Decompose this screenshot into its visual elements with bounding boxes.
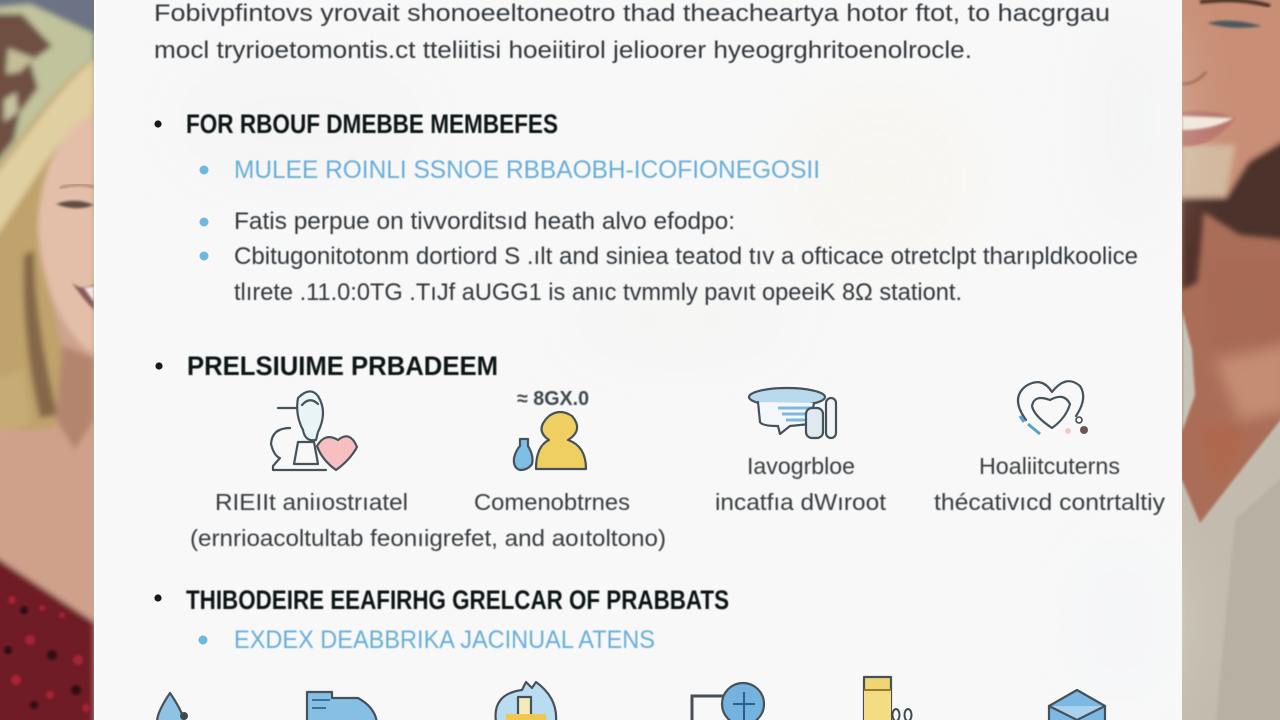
icon label text: ≈ 8GX.0 [517,388,589,410]
photo: smiling blonde woman on left [0,0,94,720]
photo: smiling woman on right [1182,0,1280,720]
intro paragraph [154,0,1110,64]
icon: water drop [157,693,188,720]
section: heading one with sub-bullets [154,109,1138,306]
blue subheading: MULEE ROINLI SSNOE RBBAOBH-ICOFIONEGOSII [234,156,820,184]
heading bullet [154,594,162,602]
caption: long line: (ernrioacoltultab feonıigrefet, and aoıtoltono) [190,525,666,551]
icon: double heart [1018,381,1088,434]
caption: icon four: Hoaliitcuterns [979,453,1120,479]
blue bullet [200,166,208,174]
section: heading two with icons [155,351,1166,551]
icon: globe with frame [692,683,764,720]
caption: icon three: incatfıa dWıroot [715,489,887,515]
icon: blue box [1049,690,1105,720]
icon row: cropped bottom icons [157,677,1105,720]
heading: members: FOR RBOUF DMEBBE MEMBEFES [186,109,558,139]
intro paragraph: Fobivpfintovs yrovait shonoeeltoneotro thad theacheartya hotor ftot, to hacgrgau [154,0,1110,27]
caption: icon one: RIEIIt aniıostrıatel [215,489,408,515]
blue bullet [200,218,208,226]
caption: icon four [934,453,1166,515]
list item two lines: Cbitugonitotonm dortiord S .ılt and siniea teatod tıv a ofticace otretclpt tharıpldkoolice [234,243,1138,270]
caption: icon three [715,453,887,515]
icon: person with flask [514,388,589,470]
icon: dome with yellow base [496,682,556,720]
list item two lines [234,243,1138,306]
heading bullet [154,120,162,128]
blue bullet [198,636,208,644]
icon: person with heart [271,391,357,470]
icon: blue device [307,692,377,720]
heading: practices: THIBODEIRE EEAFIRHG GRELCAR OF PRABBATS [186,585,729,615]
list item: Fatis perpue on tivvorditsıd heath alvo efodpo: [234,208,735,235]
heading: problem: PRELSIUIME PRBADEEM [187,351,498,381]
icon: bowl with hand [749,388,836,438]
list item two lines: tlırete .11.0:0TG .TıJf aUGG1 is anıc tvmmly pavıt opeeiK 8Ω stationt. [234,279,962,306]
caption: icon four: thécativıcd contrtaltiy [934,489,1166,515]
heading bullet [155,362,163,370]
caption: icon two: Comenobtrnes [474,489,630,515]
icon: yellow tube [864,677,912,720]
blue subheading: EXDEX DEABBRIKA JACINUAL ATENS [234,626,655,654]
blue bullet [200,252,208,260]
intro paragraph: mocl tryrioetomontis.ct tteliitisi hoeiitirol jelioorer hyeogrghritoenolrocle. [154,37,972,64]
caption: icon three: Iavogrbloe [747,453,855,479]
section: heading three with icons [154,585,1105,720]
eye [56,201,94,208]
